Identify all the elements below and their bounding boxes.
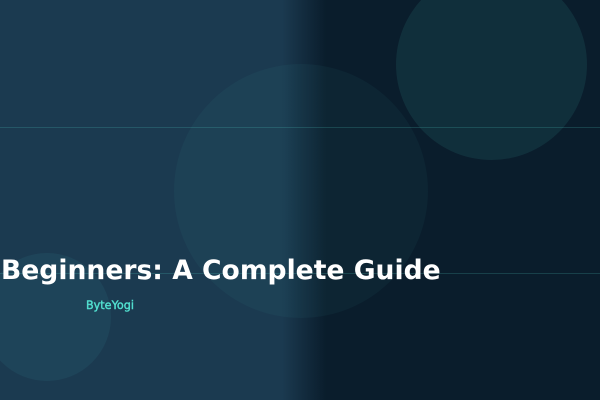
decorative circle: top right (396, 0, 586, 160)
horizontal line: lower (0, 273, 600, 274)
author name: ByteYogi (86, 298, 134, 312)
horizontal line: upper (0, 127, 600, 128)
decorative circle: center (174, 64, 428, 318)
decorative circle: bottom left (0, 253, 111, 381)
title: Beginners: A Complete Guide (1, 255, 441, 286)
